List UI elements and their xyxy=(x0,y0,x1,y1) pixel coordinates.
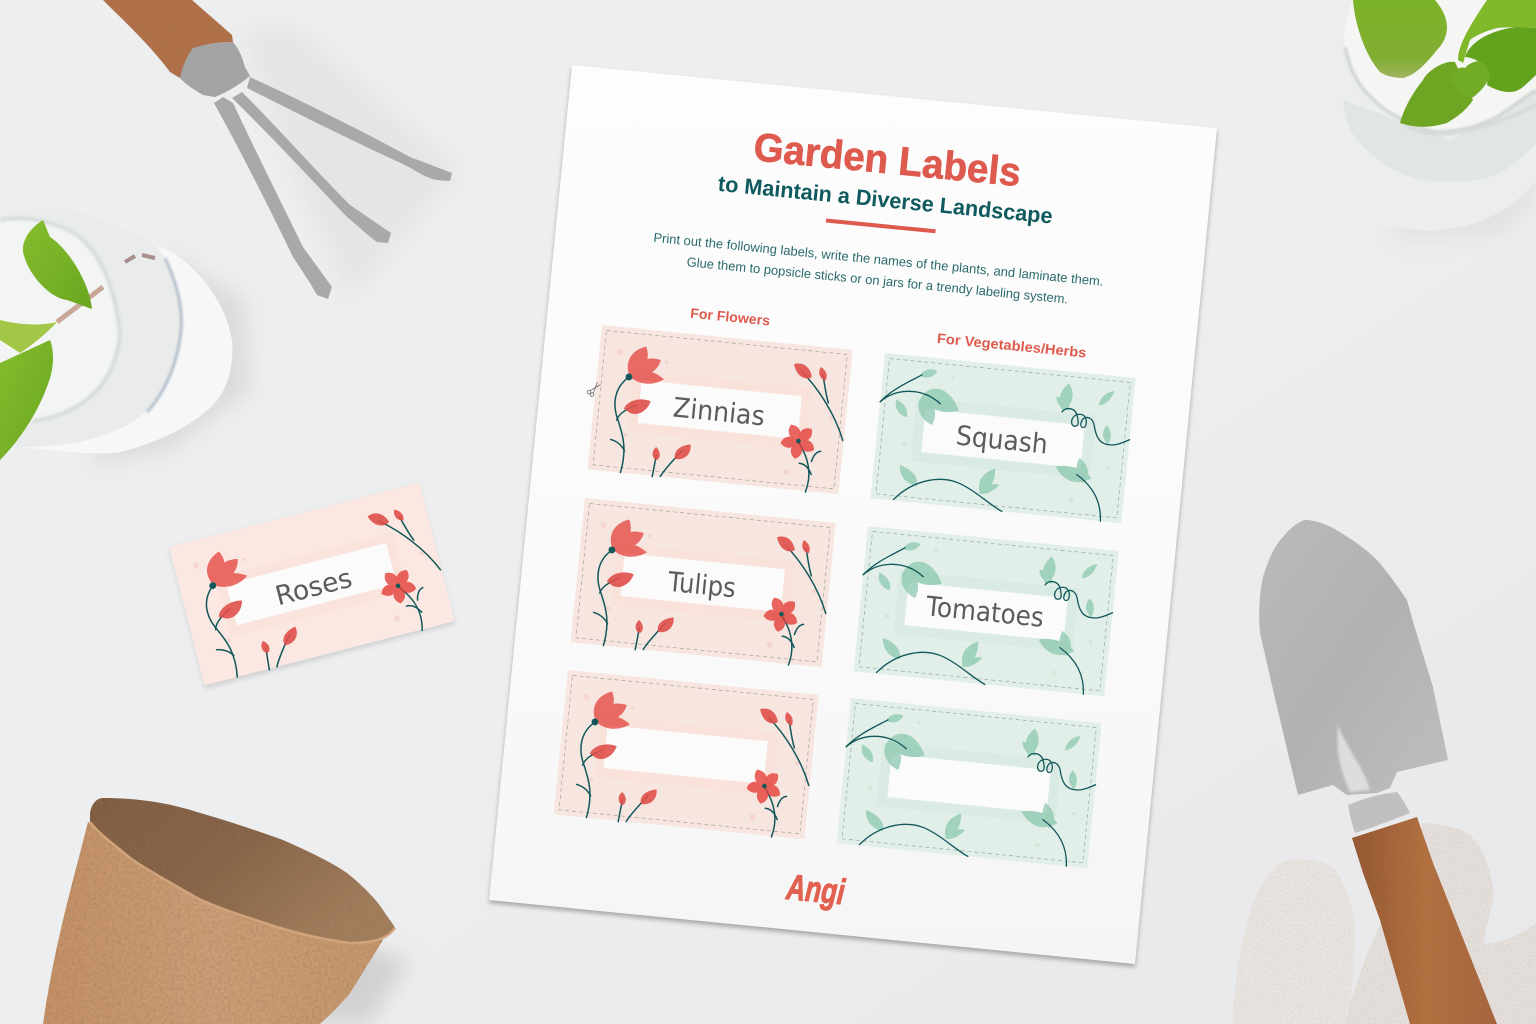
Angi logo: Angi xyxy=(784,866,847,913)
leaf lower xyxy=(0,320,57,353)
title block xyxy=(590,116,1115,932)
title: Garden Labels xyxy=(752,125,1023,195)
column heading: flowers: For Flowers xyxy=(690,305,771,329)
peat pot xyxy=(43,798,410,1024)
intro text: Glue them to popsicle sticks or on jars for a trendy labeling system. xyxy=(686,254,1069,306)
column heading: vegetables: For Vegetables/Herbs xyxy=(936,330,1087,361)
icon: scissors xyxy=(586,381,602,397)
subtitle: to Maintain a Diverse Landscape xyxy=(717,171,1054,229)
card: blank vegetable xyxy=(836,698,1102,868)
card: Tulips xyxy=(570,498,836,668)
garden trowel xyxy=(1259,520,1497,1024)
card: Squash xyxy=(870,353,1136,523)
loose card shadow xyxy=(169,485,455,689)
loose card: Roses xyxy=(169,483,455,686)
handwritten label: Squash xyxy=(955,421,1049,461)
paper sheet xyxy=(489,65,1217,964)
paper sheet shadow xyxy=(489,68,1217,967)
handwritten label: Roses xyxy=(272,563,355,612)
handwritten label: Zinnias xyxy=(672,393,766,433)
intro text: Print out the following labels, write the names of the plants, and laminate them. xyxy=(653,230,1104,289)
card: blank flower xyxy=(553,670,819,840)
card: Zinnias xyxy=(587,325,853,495)
handwritten label: Tulips xyxy=(666,567,737,604)
title underline xyxy=(826,219,936,233)
leaf upper xyxy=(23,220,92,309)
knit gloves xyxy=(1233,823,1536,1024)
glass jar left xyxy=(0,207,250,465)
garden rake xyxy=(103,0,460,300)
card: Tomatoes xyxy=(853,526,1119,696)
handwritten label: Tomatoes xyxy=(924,591,1045,634)
glass jar top right xyxy=(1314,0,1536,240)
